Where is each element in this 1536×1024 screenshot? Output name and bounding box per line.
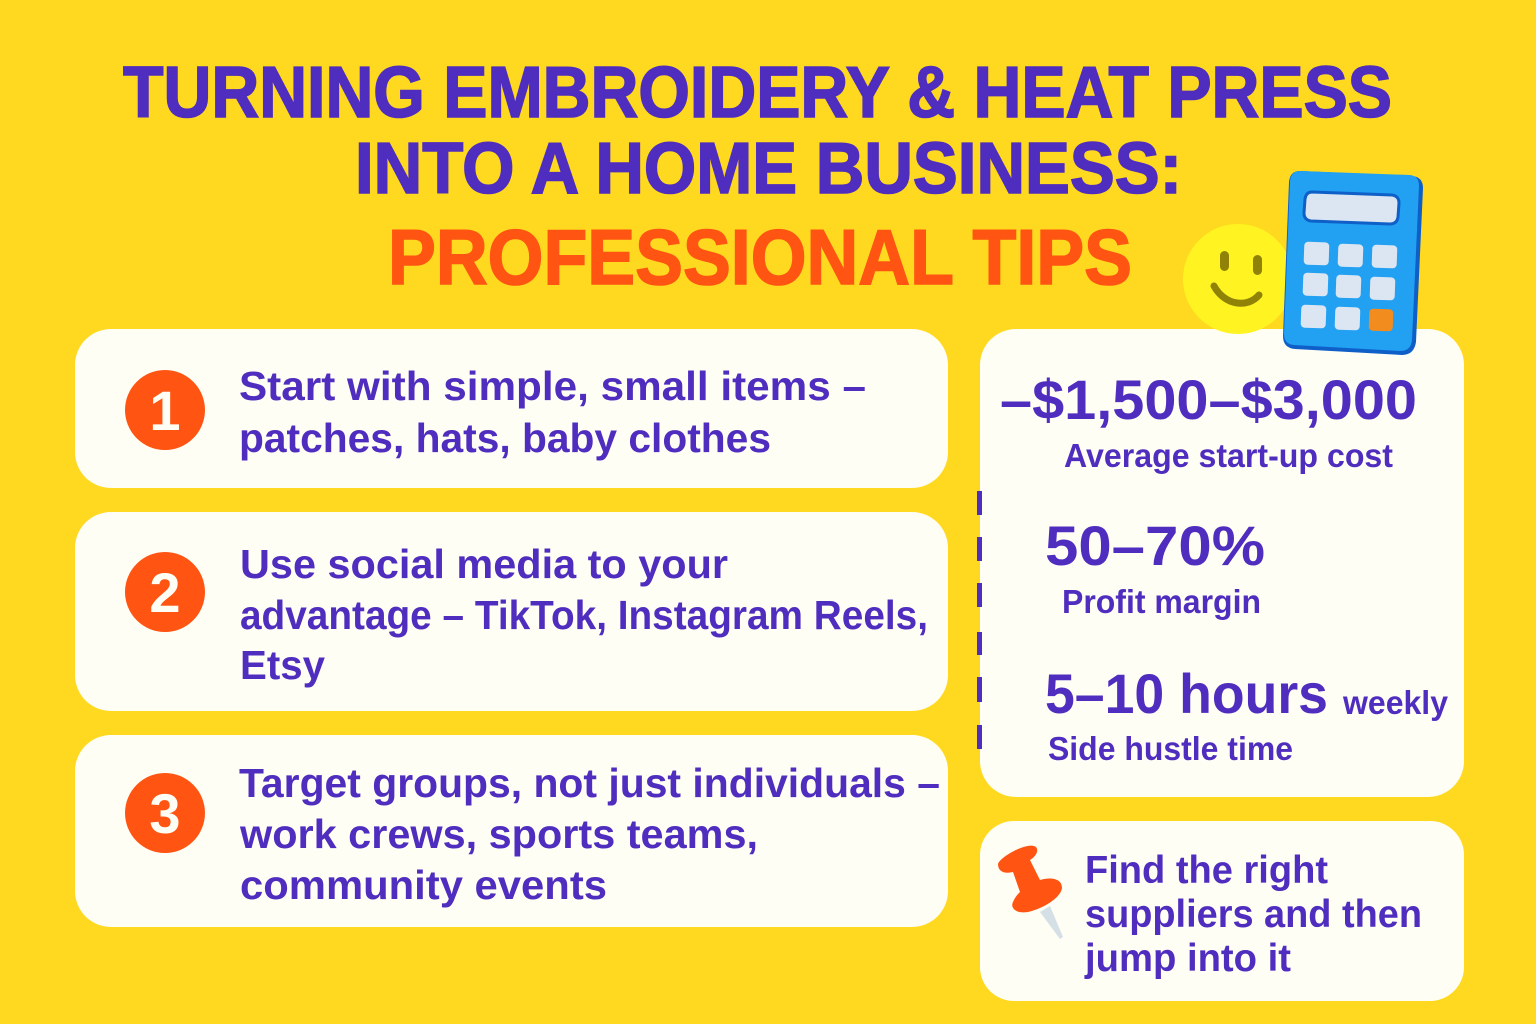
tip 2 text: Etsy xyxy=(240,642,325,688)
tip 3 text xyxy=(239,760,940,908)
panel: tip 2 xyxy=(75,512,948,711)
title: INTO A HOME BUSINESS: xyxy=(355,129,1182,209)
title: TURNING EMBROIDERY & HEAT PRESS xyxy=(123,53,1392,133)
callout text: jump into it xyxy=(1084,937,1291,980)
tip 3 text: community events xyxy=(240,862,607,908)
stat: start-up cost xyxy=(1000,368,1417,474)
number badge 3 xyxy=(125,773,205,853)
dashed line xyxy=(977,491,982,749)
stat: side hustle time xyxy=(1045,662,1449,767)
tip 1 text xyxy=(239,363,866,461)
stat: side hustle time: Side hustle time xyxy=(1048,730,1293,767)
tip 2 text: Use social media to your xyxy=(240,541,728,587)
callout text: Find the right xyxy=(1085,849,1328,892)
panel: tip 3 xyxy=(75,735,948,927)
tip 1 text: patches, hats, baby clothes xyxy=(239,415,771,461)
panel: tip 1 xyxy=(75,329,948,488)
panel: callout xyxy=(980,821,1464,1001)
panel: statistics xyxy=(977,329,1464,797)
icon: smiley xyxy=(1183,224,1293,334)
number badge 2 xyxy=(125,552,205,632)
number badge 3: 3 xyxy=(149,782,181,845)
stat: start-up cost: Average start-up cost xyxy=(1064,437,1393,474)
icon: push pin xyxy=(998,846,1063,939)
tip 2 text xyxy=(240,541,928,688)
stat: side hustle time: weekly xyxy=(1342,684,1449,721)
tip 2 text: advantage – TikTok, Instagram Reels, xyxy=(240,592,928,638)
title: PROFESSIONAL TIPS xyxy=(388,213,1132,301)
stat: side hustle time: 5–10 hours xyxy=(1045,662,1328,725)
tip 3 text: Target groups, not just individuals – xyxy=(239,760,940,806)
stat: start-up cost: –$1,500–$3,000 xyxy=(1000,368,1417,431)
title xyxy=(123,53,1392,301)
callout text xyxy=(1084,849,1422,980)
stat: profit margin: Profit margin xyxy=(1062,583,1261,620)
number badge 2: 2 xyxy=(149,561,181,624)
number badge 1: 1 xyxy=(149,379,181,442)
tip 1 text: Start with simple, small items – xyxy=(239,363,866,409)
icon: calculator xyxy=(1283,171,1423,355)
number badge 1 xyxy=(125,370,205,450)
stat: profit margin xyxy=(1045,514,1265,620)
stat: profit margin: 50–70% xyxy=(1045,514,1265,577)
tip 3 text: work crews, sports teams, xyxy=(239,811,758,857)
callout text: suppliers and then xyxy=(1085,893,1422,936)
